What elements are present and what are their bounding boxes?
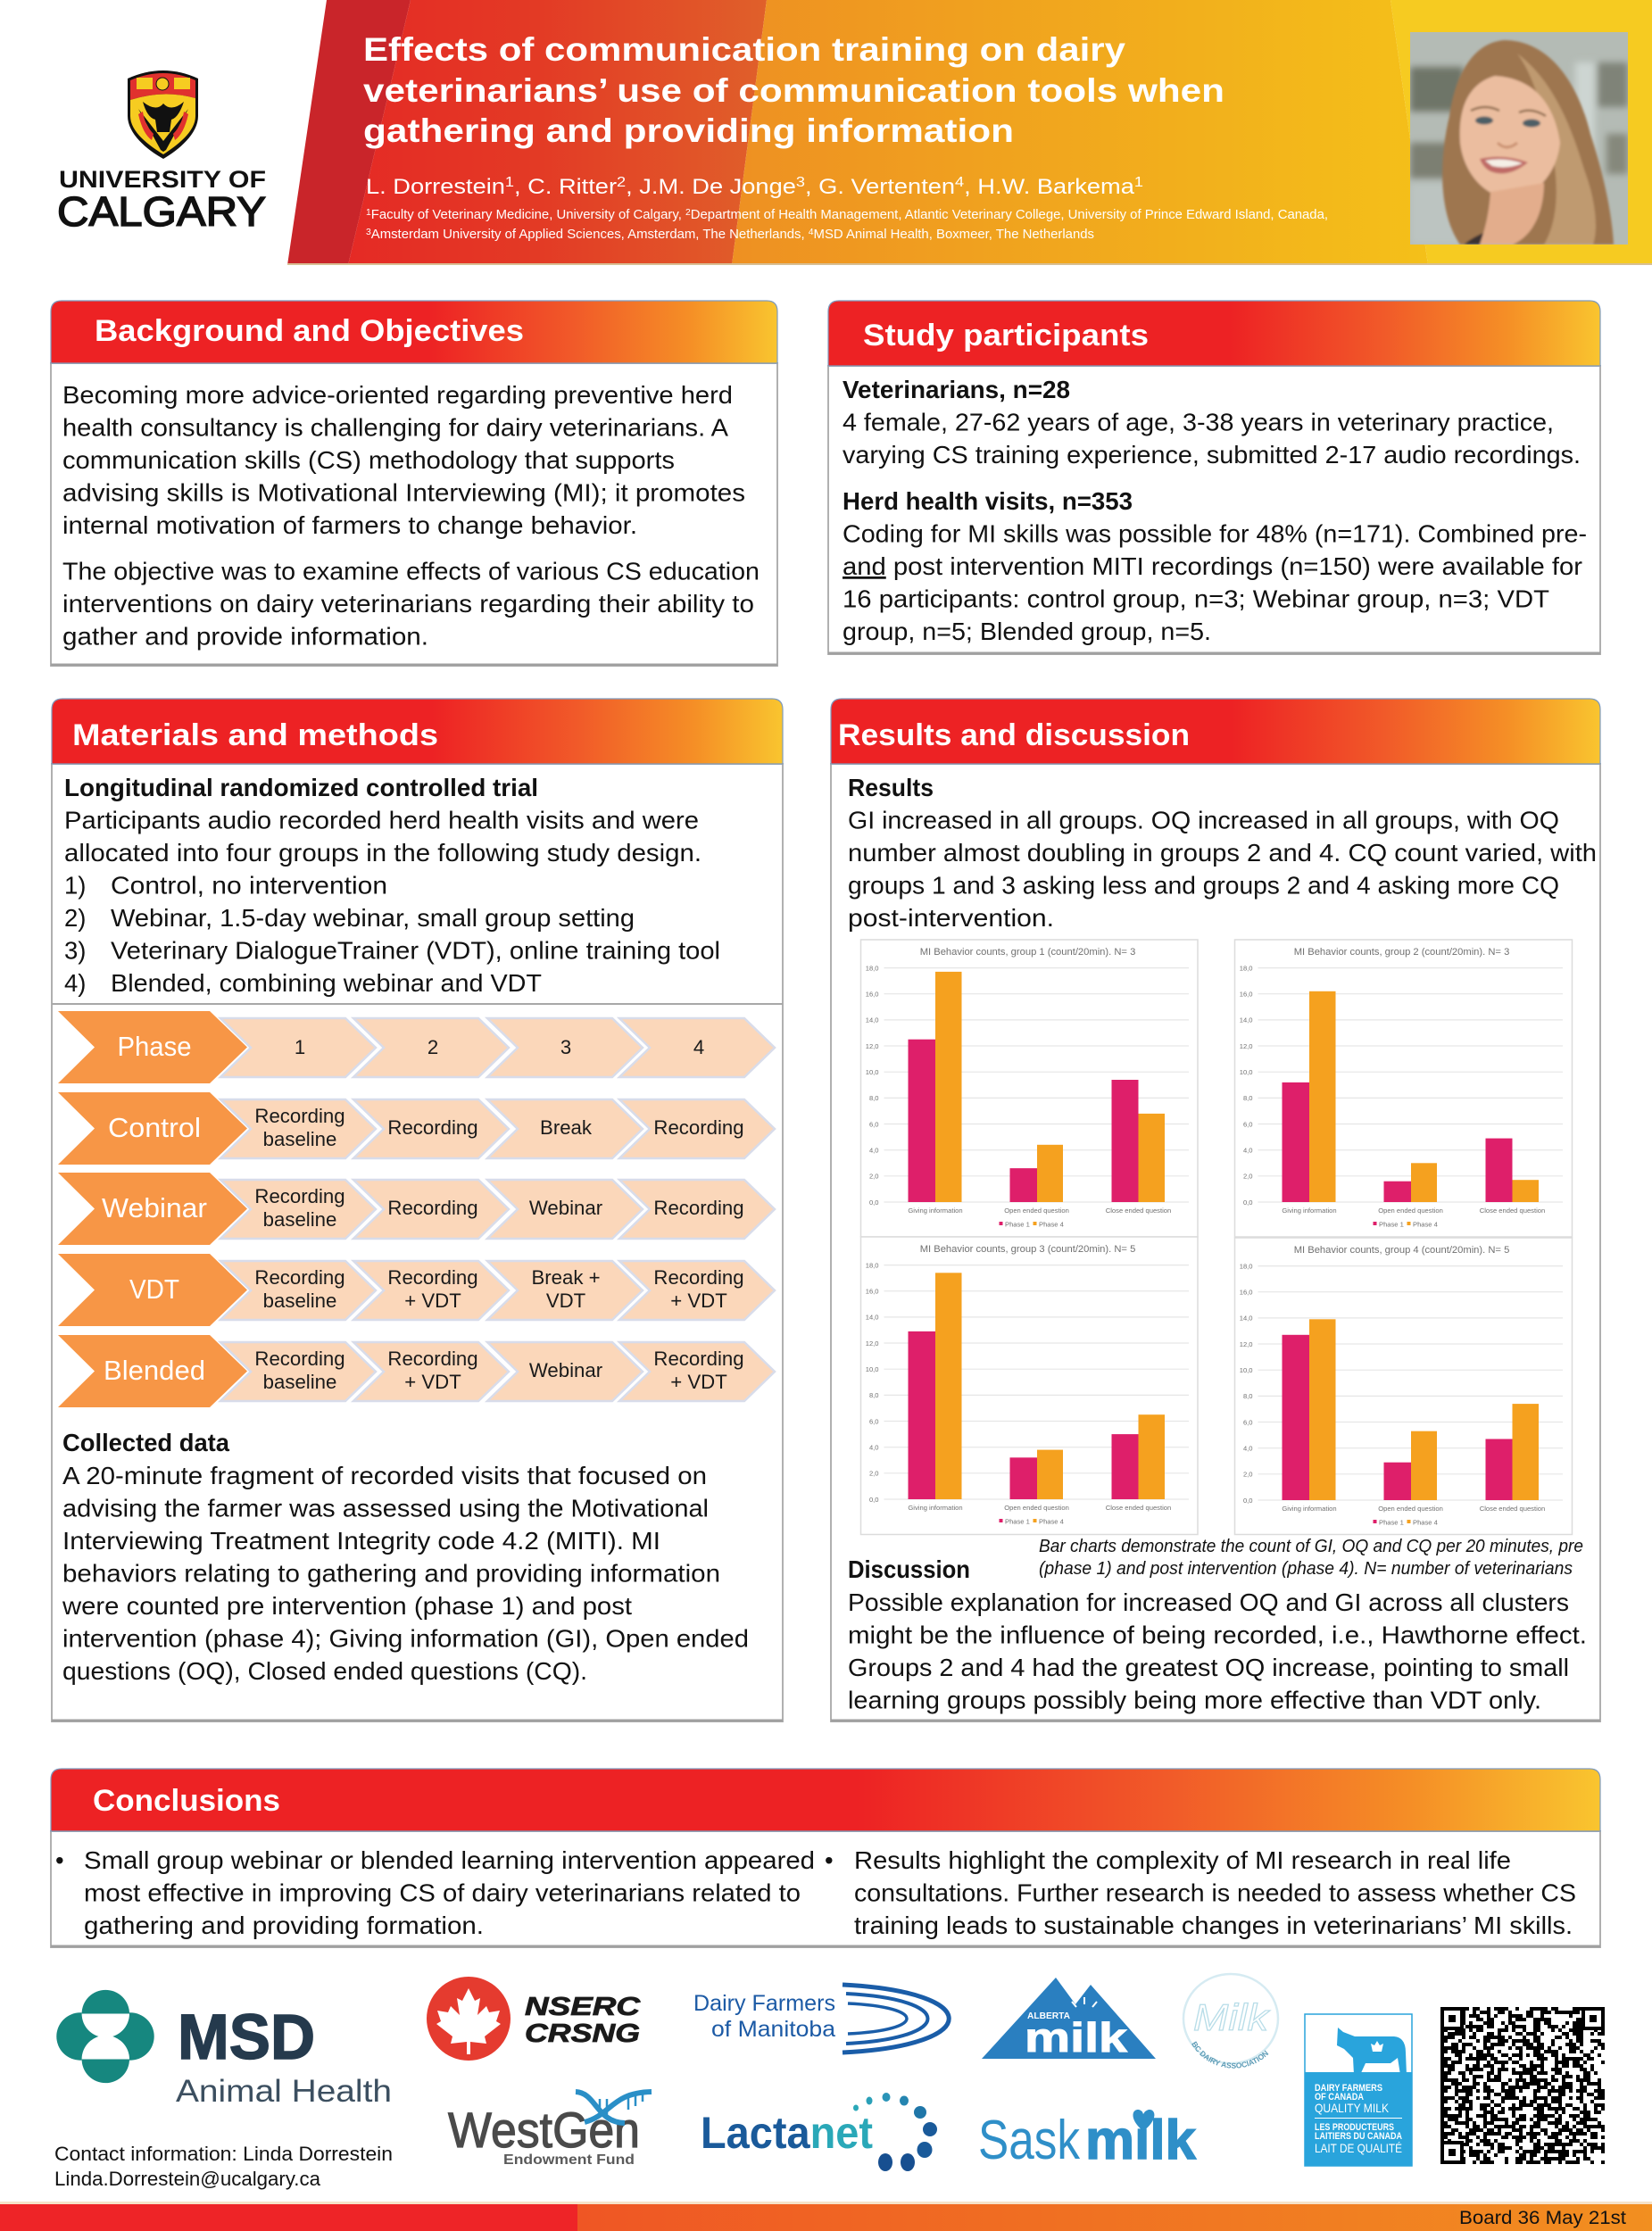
authors: , J.M. De Jonge <box>626 175 796 199</box>
heading: materials and methods <box>52 699 783 764</box>
logo: Alberta Milk: ALBERTA <box>1027 2011 1070 2021</box>
text: discussion: Groups 2 and 4 had the greatest OQ increase, pointing to small <box>848 1654 1569 1681</box>
panel: materials and methods <box>52 699 783 1721</box>
bar chart: group 4: 8,0 <box>1243 1392 1253 1400</box>
bar chart: group 1: MI Behavior counts, group 1 (count/20min). N= 3 <box>920 947 1135 958</box>
text: veterinarians: varying CS training experience, submitted 2-17 audio recordings. <box>843 441 1581 469</box>
header banner <box>287 0 1652 265</box>
text: veterinarians: Veterinarians, n=28 <box>843 376 1070 403</box>
text: collected data: Collected data <box>62 1429 230 1456</box>
bar chart: group 4: 10,0 <box>1240 1366 1253 1374</box>
logo: Dairy Farmers of Canada: LAITIERS DU CANADA <box>1315 2131 1402 2142</box>
bar chart: group 1: 8,0 <box>869 1094 878 1102</box>
bar chart: group 2: 4,0 <box>1243 1146 1253 1155</box>
title: gathering and providing information <box>363 112 1014 149</box>
bar chart: group 2: 16,0 <box>1240 991 1253 998</box>
bar chart: group 3: 16,0 <box>866 1287 878 1296</box>
text: results <box>848 774 1597 932</box>
heading: background and objectives: Background and Objectives <box>95 314 524 348</box>
text: collected data: were counted pre intervention (phase 1) and post <box>62 1592 632 1620</box>
logo: Dairy Farmers of Manitoba: Dairy Farmers <box>693 1991 835 2016</box>
row: VDT: VDT <box>546 1290 586 1312</box>
logo: MSD Animal Health <box>56 1990 392 2109</box>
row: VDT: Recording <box>387 1266 478 1289</box>
bar chart: group 3: MI Behavior counts, group 3 (count/20min). N= 5 <box>920 1244 1135 1255</box>
logo: WestGen Endowment Fund: WestGen <box>448 2102 640 2158</box>
text: discussion: Discussion <box>848 1555 970 1583</box>
row: webinar: Recording <box>387 1197 478 1219</box>
text: trial description: Participants audio recorded herd health visits and were <box>64 807 699 834</box>
text: conclusion right: • <box>825 1846 834 1874</box>
heading: materials and methods: Materials and methods <box>72 718 438 752</box>
authors: , C. Ritter <box>514 175 617 199</box>
bar chart: group 2: 0,0 <box>1243 1198 1253 1207</box>
text: trial description <box>64 774 720 997</box>
logo: Alberta Milk: milk <box>1025 2014 1128 2061</box>
heading: results and discussion <box>831 699 1600 764</box>
bar chart: group 3: 18,0 <box>866 1262 878 1269</box>
bar chart: group 3: Open ended question <box>1004 1504 1069 1512</box>
text: conclusion left <box>55 1846 815 1939</box>
text: results: post-intervention. <box>848 904 1054 932</box>
text: background: The objective was to examine effects of various CS education <box>62 557 760 585</box>
bar chart: group 1: 12,0 <box>866 1042 878 1050</box>
bar chart: group 4: 12,0 <box>1240 1340 1253 1348</box>
bar chart: group 1: Close ended question <box>1106 1207 1171 1215</box>
bar chart: group 4: Giving information <box>1282 1505 1337 1513</box>
bar chart: group 1: 10,0 <box>866 1068 878 1076</box>
authors: L. Dorrestein <box>366 175 488 199</box>
row: control: Control <box>108 1112 201 1143</box>
row: blended: Recording <box>653 1348 744 1370</box>
bar chart: group 1: 18,0 <box>866 964 878 973</box>
row: blended: + VDT <box>670 1371 727 1393</box>
row: VDT: baseline <box>263 1290 336 1312</box>
bar chart: group 3: 10,0 <box>866 1365 878 1373</box>
bar chart: group 4: MI Behavior counts, group 4 (count/20min). N= 5 <box>1294 1245 1509 1256</box>
title: Effects of communication training on dairy <box>363 30 1125 68</box>
authors: 1 <box>505 175 514 190</box>
authors: 3 <box>796 175 805 190</box>
logo: BC Dairy Association: BC DAIRY ASSOCIATION <box>1191 2041 1269 2069</box>
authors: 2 <box>617 175 626 190</box>
bar chart: group 1: 6,0 <box>869 1121 878 1128</box>
bar chart: group 3: Giving information <box>908 1504 963 1512</box>
bar chart: group 2: Giving information <box>1282 1207 1337 1215</box>
bar chart: group 1: 0,0 <box>869 1198 878 1207</box>
logo wordmark <box>57 166 266 235</box>
row: blended: Recording <box>387 1348 478 1370</box>
row: control <box>58 1092 775 1165</box>
bar chart: group 3: 0,0 <box>869 1496 878 1504</box>
panel: study participants <box>828 301 1600 654</box>
heading: background and objectives <box>51 301 777 363</box>
chart caption: Bar charts demonstrate the count of GI, OQ and CQ per 20 minutes, pre <box>1039 1536 1583 1556</box>
bar chart: group 1: 16,0 <box>866 991 878 998</box>
row: control: Recording <box>387 1116 478 1139</box>
bar chart: group 3: 14,0 <box>866 1314 878 1321</box>
row: webinar: Recording <box>254 1185 345 1207</box>
logo: WestGen Endowment Fund: Endowment Fund <box>503 2152 635 2168</box>
bar chart: group 2: 2,0 <box>1243 1173 1253 1180</box>
bar chart: group 1: Open ended question <box>1004 1207 1069 1215</box>
row: blended: + VDT <box>404 1371 461 1393</box>
contact information: Contact information: Linda Dorrestein <box>54 2143 393 2165</box>
text: herd health visits: and post intervention MITI recordings (n=150) were available for <box>843 552 1582 580</box>
logo wordmark: CALGARY <box>57 188 266 235</box>
text: trial description: Webinar, 1.5-day webinar, small group setting <box>111 904 635 932</box>
row: control: baseline <box>263 1128 336 1150</box>
logo: NSERC CRSNG: CRSNG <box>525 2020 640 2048</box>
logo: Dairy Farmers of Canada: QUALITY MILK <box>1315 2101 1390 2115</box>
text: collected data: advising the farmer was assessed using the Motivational <box>62 1494 709 1522</box>
text: herd health visits: 16 participants: control group, n=3; Webinar group, n=3; VDT <box>843 585 1549 612</box>
row: webinar <box>58 1173 775 1245</box>
row: VDT <box>58 1254 775 1326</box>
logo: BC Dairy Association <box>1182 1972 1280 2069</box>
logo: SaskMilk: Sask <box>978 2110 1081 2171</box>
text: trial description: Blended, combining webinar and VDT <box>111 969 542 997</box>
text: trial description: allocated into four groups in the following study design. <box>64 839 701 867</box>
bar chart: group 3: Phase 1 <box>1005 1517 1030 1526</box>
text: results: GI increased in all groups. OQ increased in all groups, with OQ <box>848 807 1559 834</box>
chart caption <box>1039 1536 1583 1579</box>
bar chart: group 1 <box>860 940 1198 1237</box>
authors: , G. Vertenten <box>805 175 955 199</box>
text: conclusion right: consultations. Further research is needed to assess whether CS <box>854 1879 1576 1906</box>
bar chart: group 3: Close ended question <box>1106 1504 1171 1512</box>
logo: Dairy Farmers of Manitoba <box>693 1985 949 2053</box>
text: conclusion left: gathering and providing formation. <box>84 1912 484 1939</box>
text: discussion <box>848 1555 1587 1713</box>
bar chart: group 3 <box>860 1237 1198 1535</box>
text: trial description: Longitudinal randomized controlled trial <box>64 774 538 801</box>
row: webinar: baseline <box>263 1208 336 1231</box>
row: webinar: Recording <box>653 1197 744 1219</box>
bar chart: group 2: 14,0 <box>1240 1016 1253 1024</box>
bar chart: group 2: 6,0 <box>1243 1121 1253 1128</box>
bar chart: group 2 <box>1235 940 1573 1237</box>
text: collected data: behaviors relating to gathering and providing information <box>62 1560 720 1587</box>
row: VDT: + VDT <box>404 1290 461 1312</box>
text: conclusion right: Results highlight the complexity of MI research in real life <box>854 1846 1511 1874</box>
contact information <box>54 2143 393 2190</box>
logo: NSERC CRSNG: NSERC <box>525 1993 641 2021</box>
row: control: Recording <box>653 1116 744 1139</box>
text: background <box>62 381 760 650</box>
affiliations: 4 <box>809 228 814 237</box>
logo: Dairy Farmers of Canada: DAIRY FARMERS <box>1315 2083 1382 2094</box>
chart caption: (phase 1) and post intervention (phase 4). N= number of veterinarians <box>1039 1558 1573 1579</box>
logo: Lactanet <box>701 2093 937 2171</box>
board label: Board 36 May 21st <box>1459 2208 1626 2228</box>
text: conclusion left: • <box>55 1846 64 1874</box>
bar chart: group 1: 2,0 <box>869 1173 878 1180</box>
text: herd health visits: Herd health visits, n=353 <box>843 487 1133 515</box>
contact information: Linda.Dorrestein@ucalgary.ca <box>54 2168 320 2190</box>
text: background: interventions on dairy veterinarians regarding their ability to <box>62 590 754 618</box>
logo: Dairy Farmers of Canada: LES PRODUCTEURS <box>1315 2122 1394 2133</box>
row: phase: 1 <box>295 1036 305 1058</box>
bar chart: group 1: 4,0 <box>869 1146 878 1155</box>
text: conclusion left: Small group webinar or blended learning intervention appeared <box>84 1846 815 1874</box>
text: collected data: questions (OQ), Closed ended questions (CQ). <box>62 1657 587 1685</box>
text: trial description: 1) <box>64 871 86 900</box>
bar chart: group 2: Phase 4 <box>1413 1221 1438 1228</box>
row: blended: baseline <box>263 1371 336 1393</box>
text: collected data: Interviewing Treatment Integrity code 4.2 (MITI). MI <box>62 1527 660 1555</box>
row: webinar: Webinar <box>102 1192 207 1223</box>
affiliations: MSD Animal Health, Boxmeer, The Netherlands <box>814 228 1094 242</box>
bar chart: group 4: 0,0 <box>1243 1497 1253 1505</box>
logo: Lactanet: Lactanet <box>701 2108 873 2158</box>
row: blended: Webinar <box>529 1359 603 1381</box>
text: collected data: intervention (phase 4); Giving information (GI), Open ended <box>62 1624 749 1653</box>
text: discussion: Possible explanation for increased OQ and GI across all clusters <box>848 1588 1569 1616</box>
QR code <box>1440 2007 1605 2164</box>
bar chart: group 1: Phase 1 <box>1005 1221 1030 1228</box>
bar chart: group 2: Phase 1 <box>1379 1221 1404 1228</box>
row: webinar: Webinar <box>529 1197 603 1219</box>
bar chart: group 2: 8,0 <box>1243 1094 1253 1102</box>
row: VDT: Break + <box>531 1266 601 1289</box>
text: collected data: A 20-minute fragment of recorded visits that focused on <box>62 1462 707 1489</box>
text: background: health consultancy is challenging for dairy veterinarians. A <box>62 414 729 441</box>
row: VDT: Recording <box>254 1266 345 1289</box>
bar chart: group 3: 4,0 <box>869 1444 878 1451</box>
text: results: groups 1 and 3 asking less and groups 2 and 4 asking more CQ <box>848 871 1559 900</box>
bar chart: group 2: 10,0 <box>1240 1068 1253 1076</box>
row: blended: Blended <box>104 1355 205 1386</box>
row: phase: 2 <box>428 1036 438 1058</box>
panel: results and discussion <box>831 699 1600 1721</box>
row: control: Recording <box>254 1105 345 1127</box>
bar chart: group 3: 6,0 <box>869 1417 878 1426</box>
bar chart: group 2: MI Behavior counts, group 2 (count/20min). N= 3 <box>1294 947 1509 958</box>
text: conclusion right <box>825 1846 1576 1939</box>
bar chart: group 3: 8,0 <box>869 1391 878 1399</box>
affiliations: 3 <box>366 228 371 237</box>
bar chart: group 4: 4,0 <box>1243 1444 1253 1453</box>
authors: 4 <box>955 175 964 190</box>
text: trial description: 2) <box>64 904 86 932</box>
panel: background and objectives <box>51 301 777 666</box>
text: results: number almost doubling in groups 2 and 4. CQ count varied, with <box>848 839 1597 867</box>
bar chart: group 1: 14,0 <box>866 1016 878 1024</box>
title <box>363 30 1224 149</box>
bar chart: group 4: Close ended question <box>1480 1505 1545 1513</box>
bar chart: group 2: Close ended question <box>1480 1207 1545 1215</box>
text: background: communication skills (CS) methodology that supports <box>62 446 675 474</box>
row: VDT: Recording <box>653 1266 744 1289</box>
text: veterinarians: 4 female, 27-62 years of age, 3-38 years in veterinary practice, <box>843 409 1554 435</box>
heading: study participants <box>828 301 1600 366</box>
bar chart: group 4 <box>1235 1238 1573 1535</box>
bar chart: group 4: 18,0 <box>1240 1262 1253 1271</box>
row: VDT: + VDT <box>670 1290 727 1312</box>
logo: Dairy Farmers of Manitoba: of Manitoba <box>711 2017 835 2042</box>
bar chart: group 4: Phase 1 <box>1379 1519 1404 1526</box>
row: control: Break <box>540 1116 593 1139</box>
row: phase: 4 <box>693 1036 704 1058</box>
text: veterinarians <box>843 376 1581 469</box>
text: background: advising skills is Motivational Interviewing (MI); it promotes <box>62 478 745 507</box>
text: conclusion right: training leads to sustainable changes in veterinarians’ MI skills. <box>854 1912 1573 1939</box>
bar chart: group 2: 18,0 <box>1240 964 1253 973</box>
text: collected data <box>62 1429 749 1685</box>
logo: NSERC CRSNG <box>427 1977 641 2061</box>
logo: SaskMilk <box>978 2110 1197 2171</box>
logo: University of Calgary <box>57 70 266 235</box>
bar chart: group 4: 6,0 <box>1243 1419 1253 1426</box>
bar chart: group 1: Giving information <box>908 1207 963 1215</box>
logo: BC Dairy Association: Milk <box>1193 1996 1270 2038</box>
heading: results and discussion: Results and discussion <box>838 718 1190 752</box>
portrait photo <box>1410 32 1628 245</box>
authors: 1 <box>1134 175 1143 190</box>
logo: MSD Animal Health: MSD <box>178 2003 315 2073</box>
logo: Dairy Farmers of Canada: LAIT DE QUALITÉ <box>1315 2141 1402 2155</box>
logo: MSD Animal Health: Animal Health <box>176 2074 392 2109</box>
text: discussion: might be the influence of being recorded, i.e., Hawthorne effect. <box>848 1621 1587 1649</box>
bar chart: group 2: 12,0 <box>1240 1042 1253 1050</box>
row: VDT: VDT <box>129 1273 179 1305</box>
affiliations: Amsterdam University of Applied Sciences, Amsterdam, The Netherlands, <box>371 228 809 242</box>
text: trial description: 3) <box>64 937 86 964</box>
affiliations: 1 <box>366 208 371 218</box>
bar chart: group 4: 16,0 <box>1240 1289 1253 1296</box>
bar chart: group 3: 12,0 <box>866 1339 878 1348</box>
authors: , H.W. Barkema <box>964 175 1135 199</box>
study design chevron table <box>58 1011 775 1407</box>
bar chart: group 3: 2,0 <box>869 1469 878 1478</box>
heading: conclusions: Conclusions <box>93 1784 280 1818</box>
heading: study participants: Study participants <box>863 319 1149 352</box>
text: background: internal motivation of farmers to change behavior. <box>62 511 637 539</box>
row: phase: Phase <box>118 1031 191 1062</box>
logo: SaskMilk: milk <box>1085 2110 1197 2171</box>
bar chart: group 2: Open ended question <box>1378 1207 1443 1215</box>
bar chart: group 4: 14,0 <box>1240 1314 1253 1323</box>
text: trial description: 4) <box>64 969 86 997</box>
logo: Dairy Farmers of Canada: OF CANADA <box>1315 2092 1364 2102</box>
text: herd health visits <box>843 487 1587 645</box>
row: phase <box>58 1011 775 1083</box>
heading: conclusions <box>51 1769 1600 1831</box>
row: blended: Recording <box>254 1348 345 1370</box>
bar chart: group 4: Open ended question <box>1378 1505 1443 1513</box>
row: blended <box>58 1335 775 1407</box>
bar chart: group 4: 2,0 <box>1243 1471 1253 1478</box>
text: conclusion left: most effective in improving CS of dairy veterinarians related to <box>84 1879 801 1906</box>
row: phase: 3 <box>560 1036 571 1058</box>
text: background: gather and provide information. <box>62 623 428 650</box>
affiliations: 2 <box>685 208 691 218</box>
title: veterinarians’ use of communication tools when <box>363 71 1224 109</box>
text: results: Results <box>848 774 934 801</box>
bar chart: group 3: Phase 4 <box>1039 1517 1064 1526</box>
affiliations <box>366 208 1328 242</box>
text: herd health visits: Coding for MI skills was possible for 48% (n=171). Combined pre- <box>843 519 1587 548</box>
text: trial description: Veterinary DialogueTrainer (VDT), online training tool <box>111 937 720 964</box>
footer bar <box>0 2202 1652 2231</box>
logo: Alberta Milk <box>982 1978 1156 2061</box>
affiliations: Faculty of Veterinary Medicine, University of Calgary, <box>371 208 685 222</box>
text: background: Becoming more advice-oriented regarding preventive herd <box>62 381 733 409</box>
text: discussion: learning groups possibly being more effective than VDT only. <box>848 1687 1541 1713</box>
bar chart: group 1: Phase 4 <box>1039 1221 1064 1228</box>
panel: conclusions <box>51 1769 1600 1947</box>
logo: Dairy Farmers of Canada <box>1305 2014 1412 2166</box>
bar chart: group 4: Phase 4 <box>1413 1519 1438 1526</box>
text: herd health visits: group, n=5; Blended group, n=5. <box>843 618 1211 645</box>
affiliations: Department of Health Management, Atlantic Veterinary College, University of Prince Edward Island, Canada, <box>691 208 1328 222</box>
logo wordmark: UNIVERSITY OF <box>59 166 266 193</box>
text: trial description: Control, no intervention <box>111 871 387 900</box>
